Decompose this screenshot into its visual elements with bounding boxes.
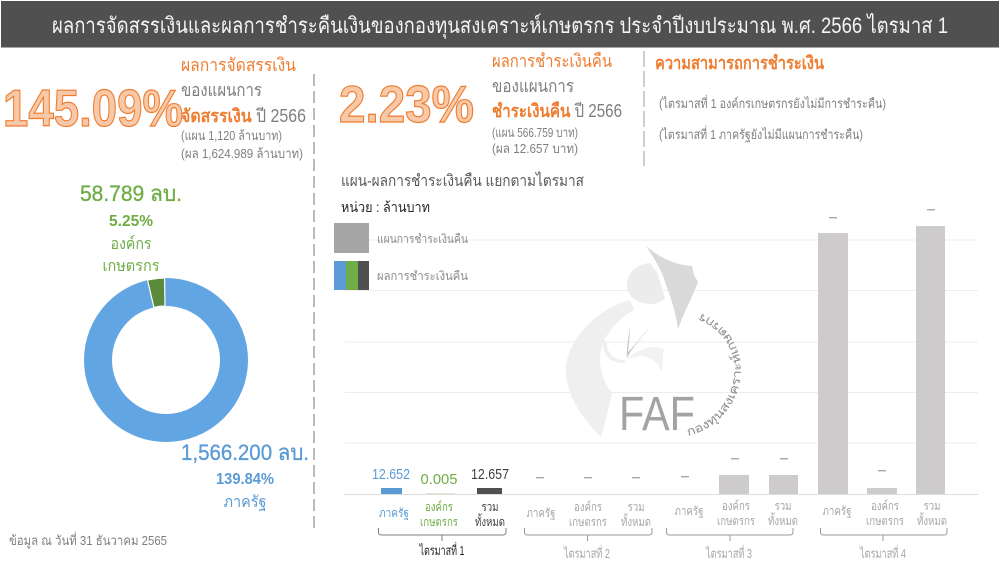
donut label: government: 1,566.200 ลบ. (181, 440, 309, 465)
bar chart (344, 209, 978, 494)
logo: inner hook (603, 340, 626, 363)
quarter titles: ไตรมาสที่ 4 (859, 545, 906, 561)
divider right (643, 51, 645, 166)
donut label: farmer organisations: 58.789 ลบ. (80, 181, 182, 206)
category labels: quarter 2: องค์กร (574, 500, 602, 514)
value labels: quarter 1: 0.005 (420, 471, 458, 488)
logo: body swoosh (566, 300, 634, 437)
category labels: quarter 3: องค์กร (722, 499, 750, 513)
chart heading: แผน-ผลการชำระเงินคืน แยกตามไตรมาส (341, 171, 584, 190)
legend: plan: แผนการชำระเงินคืน (377, 232, 468, 246)
logo: rice grain (628, 347, 664, 371)
quarter titles: ไตรมาสที่ 2 (563, 545, 610, 561)
text: allocation year: จัดสรรเงิน ปี 2566 (181, 106, 306, 126)
category labels: quarter 2: ภาครัฐ (526, 506, 556, 520)
bars: quarter 4 (818, 226, 945, 494)
value labels: quarter 1 (372, 466, 509, 488)
big number: repayment percent: 2.23% (339, 76, 474, 134)
category labels: quarter 2: ทั้งหมด (621, 513, 651, 529)
category labels: quarter 4: เกษตรกร (866, 514, 904, 528)
category labels: quarter 2: รวม (628, 500, 644, 514)
category labels: quarter 1: ภาครัฐ (379, 506, 409, 520)
quarter titles: ไตรมาสที่ 3 (705, 545, 752, 561)
logo: FAF: FAF (619, 388, 695, 441)
category labels: quarter 3: ทั้งหมด (768, 512, 798, 528)
value labels: quarter 1: 12.652 (372, 466, 410, 483)
legend: actual: ผลการชำระเงินคืน (377, 269, 468, 283)
text: repayment plan description: ของแผนการ (492, 76, 574, 96)
donut label: government: ภาครัฐ (224, 494, 266, 511)
category labels: quarter 4: ภาครัฐ (822, 504, 852, 518)
gridlines (345, 240, 978, 443)
category labels: quarter 1 (379, 500, 505, 529)
text: government note: (ไตรมาสที่ 1 ภาครัฐยังไม่มีแผนการชำระคืน) (659, 126, 863, 143)
divider left (313, 74, 315, 533)
quarter titles: ไตรมาสที่ 1 (419, 542, 464, 558)
text: allocation actual amount: (ผล 1,624.989 ล้านบาท) (181, 146, 303, 161)
text: allocation plan amount: (แผน 1,120 ล้านบาท) (181, 128, 282, 143)
donut label: farmer organisations: 5.25% (109, 213, 153, 230)
data date note: ข้อมูล ณ วันที่ 31 ธันวาคม 2565 (9, 532, 167, 549)
value labels: quarter 1: 12.657 (471, 466, 509, 483)
category labels: quarter 4: ทั้งหมด (917, 512, 947, 528)
logo: check mark (627, 326, 651, 358)
heading: allocation result: ผลการจัดสรรเงิน (181, 55, 296, 75)
text: farmer organisations note: (ไตรมาสที่ 1 องค์กรเกษตรกรยังไม่มีการชำระคืน) (659, 95, 886, 111)
logo: dark leaf (646, 246, 698, 329)
panel: allocation result (3, 55, 306, 161)
panel: repayment result (339, 51, 622, 156)
heading: repayment result: ผลการชำระเงินคืน (492, 51, 612, 71)
category labels: quarter 1: ทั้งหมด (475, 513, 505, 529)
text: repayment plan amount: (แผน 566.759 บาท) (492, 125, 578, 140)
category labels: quarter 4 (822, 499, 947, 528)
bars: quarter 1 (381, 488, 502, 494)
logo: fund name on arc: กองทุนสงเคราะห์เกษตรกร (688, 314, 741, 436)
panel: repayment ability (655, 53, 886, 143)
legend (334, 223, 468, 290)
category labels: quarter 3 (674, 499, 798, 528)
value dashes: no data (536, 209, 935, 478)
category labels: quarter 1: องค์กร (425, 500, 453, 514)
category labels: quarter 1: รวม (482, 500, 498, 514)
title banner (1, 1, 999, 48)
brackets: quarters (378, 528, 947, 541)
category labels: quarter 3: เกษตรกร (717, 514, 755, 528)
category labels: quarter 3: รวม (774, 499, 792, 513)
axis baseline (344, 494, 978, 496)
category labels: quarter 4: องค์กร (871, 499, 899, 513)
donut chart (98, 278, 234, 428)
text: repayment actual amount: (ผล 12.657 บาท) (492, 141, 578, 156)
text: repayment year: ชำระเงินคืน ปี 2566 (492, 101, 622, 121)
chart unit: หน่วย : ล้านบาท (341, 199, 430, 215)
logo: head (627, 263, 665, 304)
donut label: farmer organisations: องค์กร (110, 234, 152, 253)
bars: quarter 3 (719, 475, 798, 494)
category labels: quarter 2: เกษตรกร (569, 515, 607, 529)
quarter titles (419, 542, 906, 561)
category labels: quarter 1: เกษตรกร (420, 515, 458, 529)
donut label: farmer organisations: เกษตรกร (102, 258, 160, 275)
watermark logo (566, 246, 741, 441)
category labels: quarter 2 (526, 500, 651, 529)
text: allocation plan description: ของแผนการ (181, 80, 262, 100)
donut label: government (181, 440, 309, 511)
heading: repayment ability: ความสามารถการชำระเงิน (655, 53, 825, 73)
big number: allocation percent: 145.09% (3, 80, 183, 138)
category labels: quarter 4: รวม (924, 499, 940, 513)
category labels: quarter 3: ภาครัฐ (674, 504, 704, 518)
donut label: farmer organisations (80, 181, 182, 275)
donut label: government: 139.84% (216, 471, 274, 488)
